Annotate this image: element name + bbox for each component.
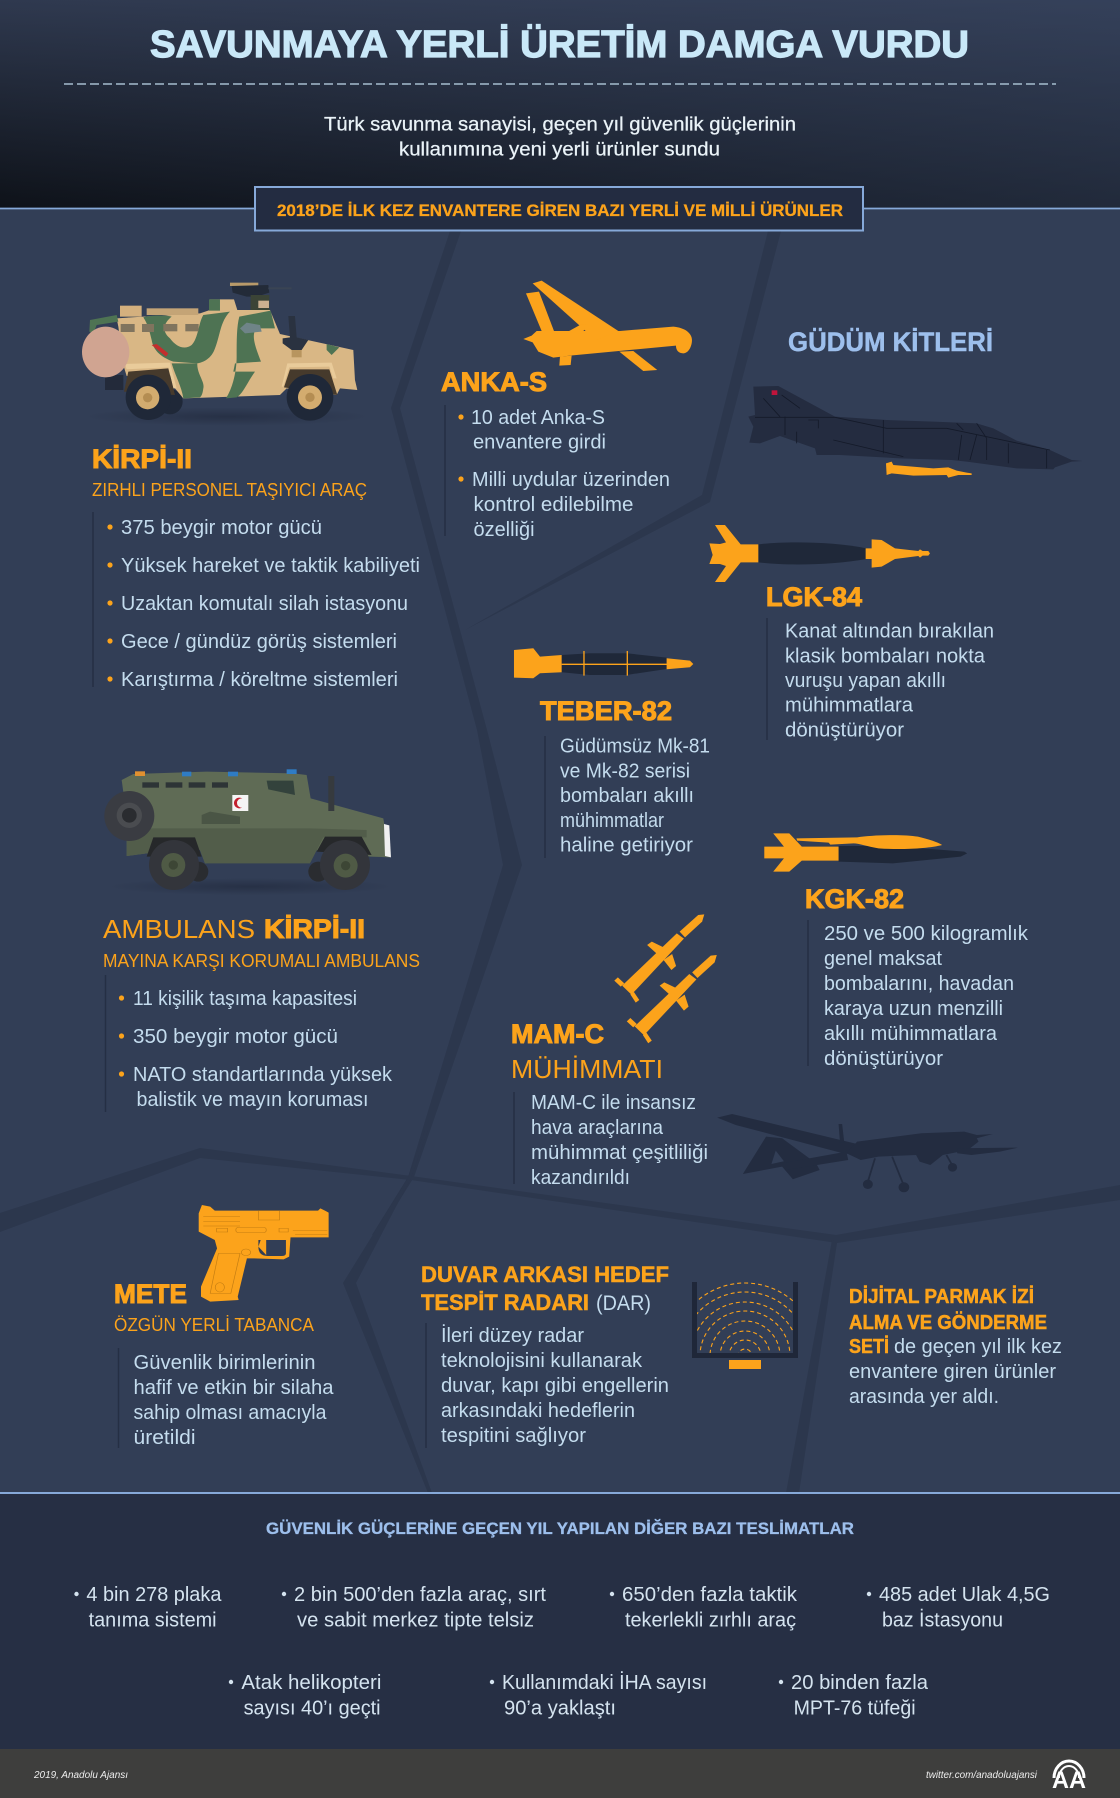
- section banner: [255, 187, 863, 230]
- text block: digital fingerprint set: arasında yer aldı.: [849, 1385, 999, 1408]
- description: İleri düzey radar: [441, 1324, 584, 1347]
- heading: LGK-84: [766, 582, 862, 612]
- background shards: [0, 231, 1120, 1493]
- text block: digital fingerprint set: de geçen yıl ilk kez: [894, 1335, 1062, 1358]
- description: arkasındaki hedeflerin: [441, 1399, 635, 1422]
- heading: AMBULANS: [103, 914, 255, 944]
- item: plate recognition: 4 bin 278 plaka: [86, 1584, 222, 1606]
- icon: LGK-84 bomb: [709, 525, 930, 582]
- heading: GÜVENLİK GÜÇLERİNE GEÇEN YIL YAPILAN DİĞER BAZI TESLİMATLAR: [266, 1519, 854, 1538]
- description: Kanat altından bırakılan: [785, 620, 994, 643]
- feature list: 11 kişilik taşıma kapasitesi: [133, 987, 357, 1010]
- feature list: Milli uydular üzerinden: [472, 468, 670, 491]
- description: mühimmatlara: [785, 694, 914, 717]
- feature list: 10 adet Anka-S: [471, 406, 605, 429]
- panel: wall radar: [421, 1262, 818, 1448]
- feature list: 350 beygir motor gücü: [133, 1025, 338, 1048]
- text block: digital fingerprint set: [849, 1285, 1062, 1408]
- heading: METE: [114, 1279, 187, 1309]
- panel: MAM-C: [511, 914, 717, 1189]
- logo: AA: AA: [1052, 1767, 1086, 1794]
- heading: KGK-82: [805, 884, 904, 914]
- subtitle: Türk savunma sanayisi, geçen yıl güvenlik güçlerinin: [324, 114, 796, 136]
- heading: [103, 914, 365, 944]
- heading: TESPİT RADARI: [421, 1290, 589, 1315]
- panel: Kirpi-II: [82, 283, 420, 691]
- description: sahip olması amacıyla: [134, 1401, 327, 1424]
- item: UAV count: Kullanımdaki İHA sayısı: [502, 1671, 707, 1694]
- item: base stations: 485 adet Ulak 4,5G: [879, 1584, 1050, 1606]
- heading: ANKA-S: [441, 367, 547, 397]
- subtitle: kullanımına yeni yerli ürünler sundu: [399, 138, 720, 160]
- item: radios: ve sabit merkez tipte telsiz: [297, 1610, 534, 1632]
- subheading: MÜHİMMATI: [511, 1054, 663, 1084]
- panel: Anka-S: [441, 281, 692, 541]
- heading: (DAR): [596, 1292, 651, 1315]
- description: kazandırıldı: [531, 1166, 630, 1189]
- description: Güdümsüz Mk-81: [560, 735, 710, 758]
- description: 250 ve 500 kilogramlık: [824, 922, 1029, 945]
- subheading: ZIRHLI PERSONEL TAŞIYICI ARAÇ: [92, 480, 367, 500]
- subheading: ÖZGÜN YERLİ TABANCA: [114, 1315, 314, 1335]
- description: hafif ve etkin bir silaha: [134, 1376, 334, 1399]
- text block: digital fingerprint set: SETİ: [849, 1335, 889, 1358]
- item: MPT-76 rifles: MPT-76 tüfeği: [794, 1698, 916, 1720]
- icon: radar: [692, 1282, 798, 1369]
- description: dönüştürüyor: [785, 719, 904, 742]
- description: Güvenlik birimlerinin: [134, 1351, 316, 1374]
- icon: fighter jet with bomb: [748, 386, 1083, 478]
- description: genel maksat: [824, 947, 942, 970]
- feature list: [106, 975, 393, 1112]
- description: [545, 735, 710, 858]
- text block: digital fingerprint set: DİJİTAL PARMAK İZİ: [849, 1285, 1034, 1308]
- description: teknolojisini kullanarak: [441, 1349, 643, 1372]
- item: MPT-76 rifles: [779, 1672, 929, 1720]
- description: bombaları akıllı: [560, 784, 694, 807]
- credit: 2019, Anadolu Ajansı: [33, 1770, 128, 1781]
- footer: [0, 1749, 1120, 1798]
- item: UAV count: 90’a yaklaştı: [504, 1698, 616, 1720]
- item: base stations: [867, 1584, 1050, 1632]
- social handle: twitter.com/anadoluajansi: [926, 1770, 1038, 1781]
- heading: DUVAR ARKASI HEDEF: [421, 1262, 669, 1287]
- description: duvar, kapı gibi engellerin: [441, 1374, 669, 1397]
- description: haline getiriyor: [560, 834, 693, 857]
- description: [118, 1348, 334, 1449]
- description: üretildi: [134, 1426, 196, 1449]
- description: [514, 1091, 708, 1189]
- description: tespitini sağlıyor: [441, 1424, 586, 1447]
- description: [426, 1323, 669, 1448]
- feature list: Uzaktan komutalı silah istasyonu: [121, 592, 408, 615]
- heading: MAM-C: [511, 1019, 604, 1049]
- item: radios: 2 bin 500’den fazla araç, sırt: [294, 1584, 546, 1606]
- panel: Mete pistol: [114, 1205, 334, 1449]
- text block: digital fingerprint set: envantere giren ürünler: [849, 1360, 1056, 1383]
- description: mühimmatlar: [560, 809, 664, 832]
- description: MAM-C ile insansız: [531, 1091, 696, 1114]
- item: MPT-76 rifles: 20 binden fazla: [791, 1672, 929, 1694]
- item: plate recognition: tanıma sistemi: [89, 1610, 217, 1632]
- item: armoured vehicles: [610, 1584, 798, 1632]
- icon: Teber-82 bomb: [514, 648, 693, 678]
- icon: Bayraktar drone silhouette: [717, 1114, 1018, 1192]
- description: hava araçlarına: [531, 1116, 664, 1139]
- subheading: MAYINA KARŞI KORUMALI AMBULANS: [103, 951, 420, 971]
- panel: other deliveries: [0, 1493, 1120, 1749]
- panel: LGK-84: [709, 525, 994, 742]
- description: karaya uzun menzilli: [824, 997, 1003, 1020]
- heading: TEBER-82: [540, 696, 672, 726]
- title: SAVUNMAYA YERLİ ÜRETİM DAMGA VURDU: [150, 23, 969, 66]
- feature list: NATO standartlarında yüksek: [133, 1063, 393, 1086]
- description: dönüştürüyor: [824, 1047, 943, 1070]
- item: armoured vehicles: tekerlekli zırhlı araç: [625, 1610, 796, 1632]
- feature list: balistik ve mayın koruması: [136, 1088, 368, 1111]
- feature list: özelliği: [474, 518, 534, 541]
- item: UAV count: [490, 1671, 707, 1720]
- feature list: [93, 512, 420, 691]
- item: base stations: baz İstasyonu: [882, 1609, 1003, 1632]
- description: mühimmat çeşitliliği: [531, 1141, 708, 1164]
- description: bombalarını, havadan: [824, 972, 1014, 995]
- description: [808, 920, 1029, 1070]
- item: Atak helicopters: sayısı 40’ı geçti: [244, 1698, 381, 1720]
- description: [767, 618, 994, 742]
- item: Atak helicopters: [229, 1672, 381, 1720]
- header band: [0, 0, 1120, 208]
- item: Atak helicopters: Atak helikopteri: [241, 1672, 381, 1694]
- icon: pistol: [199, 1205, 329, 1302]
- feature list: Karıştırma / köreltme sistemleri: [121, 668, 398, 691]
- description: akıllı mühimmatlara: [824, 1022, 998, 1045]
- heading: [421, 1262, 669, 1315]
- panel: Teber-82: [514, 648, 710, 858]
- description: vuruşu yapan akıllı: [785, 669, 946, 692]
- section banner: 2018’DE İLK KEZ ENVANTERE GİREN BAZI YERLİ VE MİLLİ ÜRÜNLER: [277, 201, 843, 220]
- panel: Ambulans Kirpi-II: [103, 769, 420, 1112]
- feature list: Yüksek hareket ve taktik kabiliyeti: [121, 554, 420, 577]
- icon: Anka-S drone: [523, 281, 692, 371]
- icon: MAM-C missiles: [614, 914, 717, 1043]
- image: ambulance vehicle: [104, 769, 393, 895]
- feature list: [445, 405, 670, 541]
- heading: guidance kits: GÜDÜM KİTLERİ: [788, 327, 993, 357]
- item: armoured vehicles: 650’den fazla taktik: [622, 1584, 798, 1606]
- panel: KGK-82: [764, 833, 1029, 1070]
- image: Kirpi-II armoured vehicle: [82, 283, 370, 426]
- item: plate recognition: [74, 1584, 222, 1632]
- item: radios: [282, 1584, 546, 1632]
- description: klasik bombaları nokta: [785, 644, 986, 667]
- icon: KGK-82 bomb: [764, 833, 967, 872]
- heading: KİRPİ-II: [92, 444, 192, 474]
- feature list: Gece / gündüz görüş sistemleri: [121, 630, 397, 653]
- heading: KİRPİ-II: [264, 914, 365, 944]
- feature list: envantere girdi: [473, 430, 606, 454]
- feature list: 375 beygir motor gücü: [121, 516, 322, 539]
- feature list: kontrol edilebilme: [474, 493, 634, 516]
- description: ve Mk-82 serisi: [560, 759, 690, 782]
- text block: digital fingerprint set: ALMA VE GÖNDERME: [849, 1311, 1047, 1334]
- subtitle: [324, 114, 796, 160]
